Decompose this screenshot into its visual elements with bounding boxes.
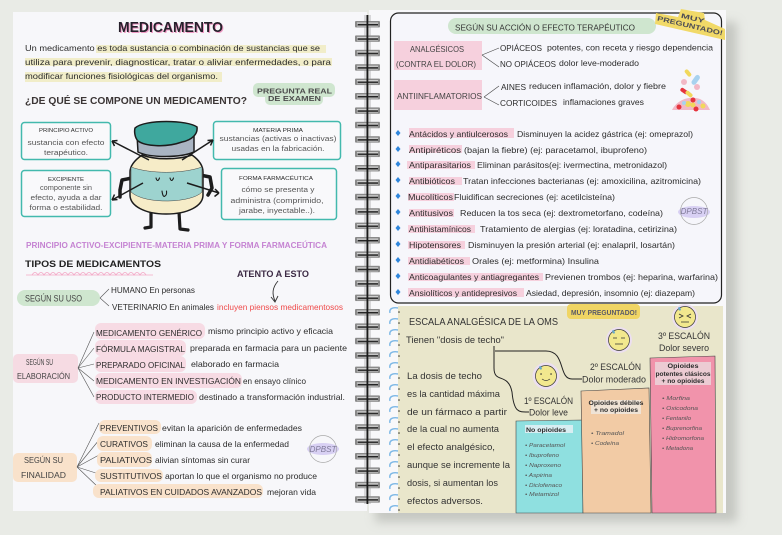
box: materia prima: sustancias (activas o inactivas) <box>220 136 336 143</box>
box: excipiente <box>22 170 110 216</box>
group: antiinflamatorios <box>394 80 666 110</box>
list: drug classes: Antácidos y antiulcerosos <box>409 129 508 139</box>
step: primer escalón <box>516 362 583 513</box>
group: antiinflamatorios: CORTICOIDES <box>500 98 557 108</box>
box: forma farmacéutica: jarabe, inyectable..). <box>238 208 315 215</box>
list: drug classes: Antihistamínicos <box>409 224 471 234</box>
badge: muy preguntado <box>567 304 640 319</box>
badge: muy preguntado <box>655 8 725 40</box>
step: segundo escalón: • Codeína <box>591 441 619 447</box>
badge: muy preguntado: MUY <box>680 13 706 25</box>
list: drug classes: Antiparasitarios <box>409 160 471 170</box>
group: analgésicos: dolor leve-moderado <box>559 58 639 68</box>
heading: escala: ESCALA ANALGÉSICA DE LA OMS <box>409 315 558 328</box>
step: tercer escalón <box>650 304 716 513</box>
step: tercer escalón: • Metadona <box>662 446 693 452</box>
group: según su elaboración: MEDICAMENTO GENÉRICO <box>96 328 202 338</box>
step: tercer escalón: • Morfina <box>662 396 690 402</box>
list: drug classes: Disminuyen la acidez gástrica (ej: omeprazol) <box>517 129 693 139</box>
step: primer escalón: • Diclofenaco <box>525 483 562 489</box>
box: excipiente: forma o estabilidad. <box>30 205 103 212</box>
group: según su uso: SEGÚN SU USO <box>25 294 82 304</box>
list: drug classes: Fluidifican secreciones (ej: acetilcisteína) <box>454 192 615 202</box>
text: dosis de techo: de un fármaco a partir <box>407 407 507 417</box>
text block: definition: utiliza para prevenir, diagnosticar, tratar o aliviar enfermedades, o para <box>25 57 331 67</box>
group: según su elaboración: PRODUCTO INTERMEDIO <box>96 392 194 402</box>
text: dosis de techo: Tienen "dosis de techo" <box>406 335 504 345</box>
box: materia prima: MATERIA PRIMA <box>253 128 303 134</box>
list: drug classes: Previenen trombos (ej: heparina, warfarina) <box>545 272 718 282</box>
step: segundo escalón: Opioides débiles <box>588 400 644 407</box>
group: según su elaboración: mismo principio activo y eficacia <box>208 326 333 336</box>
text block: definition: modificar funciones fisiológicas del organismo. <box>25 71 218 81</box>
text: dosis de techo: La dosis de techo <box>407 371 482 381</box>
icon: watermark stamp left: DPBST <box>310 445 337 454</box>
group: analgésicos: (CONTRA EL DOLOR) <box>396 59 476 69</box>
icon: watermark stamp right <box>678 198 710 224</box>
list: drug classes: Tratan infecciones bacterianas (ej: amoxicilina, azitromicina) <box>463 176 701 186</box>
group: antiinflamatorios: inflamaciones graves <box>563 97 644 107</box>
group: según su uso: incluyen piensos medicamentosos <box>217 302 343 312</box>
list: drug classes: Asiedad, depresión, insomnio (ej: diazepam) <box>526 288 695 298</box>
group: según su finalidad: FINALIDAD <box>21 471 66 480</box>
page shadow <box>375 22 737 522</box>
badge: pregunta real de examen: DE EXAMEN <box>268 94 321 103</box>
step: segundo escalón: 2º ESCALÓN <box>590 362 641 372</box>
group: analgésicos: potentes, con receta y riesgo dependencia <box>547 42 713 52</box>
text: dosis de techo: aunque se incremente la <box>407 460 510 470</box>
group: según su elaboración: destinado a transformación industrial. <box>199 392 345 402</box>
step: tercer escalón: • Oxicodona <box>662 406 698 412</box>
group: según su elaboración: elaborado en farmacia <box>191 359 279 369</box>
group: según su uso: HUMANO En personas <box>111 285 195 295</box>
step: primer escalón: • Metamizol <box>525 492 560 498</box>
group: según su finalidad: SUSTITUTIVOS <box>100 471 162 481</box>
step: tercer escalón: • Fentanilo <box>662 416 691 422</box>
list: drug classes <box>396 128 718 298</box>
box: principio activo: sustancia con efecto <box>28 140 105 147</box>
list: drug classes: Anticoagulantes y antiagregantes <box>409 272 539 282</box>
icon: jar mascot <box>120 122 212 230</box>
group: según su finalidad: SEGÚN SU <box>24 456 63 465</box>
step: primer escalón: • Naproxeno <box>525 463 561 469</box>
text: dosis de techo: es la cantidad máxima <box>407 389 500 399</box>
group: según su elaboración: FÓRMULA MAGISTRAL <box>96 344 185 354</box>
title: MEDICAMENTO <box>118 19 223 36</box>
step: tercer escalón: • Hidromorfona <box>662 436 704 442</box>
group: según su finalidad <box>13 420 317 498</box>
box: excipiente: EXCIPIENTE <box>48 177 84 183</box>
box: materia prima: usadas en la fabricación. <box>232 146 325 153</box>
step: segundo escalón: • Tramadol <box>591 431 625 437</box>
step: tercer escalón: • Buprenorfina <box>662 426 702 432</box>
list: drug classes: Tratamiento de alergias (ej: loratadina, cetirizina) <box>480 224 677 234</box>
step: primer escalón: • Aspirina <box>525 473 552 479</box>
icon: watermark stamp left <box>307 436 339 462</box>
step: tercer escalón: Opioides <box>668 363 699 370</box>
icon: watermark stamp right: DPBST <box>681 207 708 216</box>
box: forma farmacéutica: FORMA FARMACÉUTICA <box>239 175 313 182</box>
header pill: SEGÚN SU ACCIÓN O EFECTO TERAPÉUTICO <box>455 22 635 32</box>
badge: pregunta real de examen: PREGUNTA REAL <box>257 86 332 96</box>
text: dosis de techo: de la cual no aumenta <box>407 424 499 434</box>
group: según su finalidad: PREVENTIVOS <box>100 423 158 433</box>
panel: escala analgésica <box>389 304 723 513</box>
box: excipiente: efecto, ayuda a dar <box>30 195 102 202</box>
badge: pregunta real de examen <box>253 83 335 105</box>
group: según su finalidad: aportan lo que el organismo no produce <box>165 471 317 481</box>
box: principio activo <box>22 122 110 160</box>
group: analgésicos: OPIÁCEOS <box>500 43 542 53</box>
box: principio activo: terapéutico. <box>44 150 88 157</box>
group: según su uso: VETERINARIO En animales <box>112 302 214 312</box>
text block: definition <box>25 43 332 82</box>
step: primer escalón: • Paracetamol <box>525 443 566 449</box>
step: primer escalón: • Ibuprofeno <box>525 453 559 459</box>
arrows: jar to boxes <box>112 140 219 200</box>
group: según su finalidad: alivian síntomas sin curar <box>155 455 250 465</box>
group: según su elaboración: preparada en farmacia para un paciente <box>190 343 347 353</box>
step: tercer escalón: 3º ESCALÓN <box>658 331 710 341</box>
panel: left page <box>13 12 367 511</box>
title: MEDICAMENTO <box>119 20 224 37</box>
group: según su finalidad: eliminan la causa de la enfermedad <box>155 439 289 449</box>
box: principio activo: PRINCIPIO ACTIVO <box>39 128 93 134</box>
list: drug classes: Mucolíticos <box>408 192 453 202</box>
header pill <box>448 18 656 34</box>
group: según su finalidad: evitan la aparición de enfermedades <box>162 423 302 433</box>
list: drug classes: Antidiabéticos <box>409 256 464 266</box>
text: dosis de techo: dosis, si aumentan los <box>407 478 499 488</box>
list: drug classes: Ansiolíticos y antidepresivos <box>409 288 517 298</box>
list: drug classes: Eliminan parásitos(ej: ivermectina, metronidazol) <box>477 160 667 170</box>
step: segundo escalón: + no opioides <box>594 407 639 414</box>
callout: atento a esto <box>237 269 309 302</box>
group: antiinflamatorios: ANTIINFLAMATORIOS <box>397 91 482 101</box>
step: primer escalón: Dolor leve <box>529 408 568 418</box>
group: según su elaboración: ELABORACIÓN <box>17 372 70 381</box>
heading: tipos de medicamentos: TIPOS DE MEDICAMENTOS <box>25 259 161 270</box>
list: drug classes: Disminuyen la presión arterial (ej: enalapril, losartán) <box>468 240 675 250</box>
connector lines <box>494 346 582 412</box>
step: primer escalón: 1º ESCALÓN <box>524 396 573 406</box>
box: materia prima <box>214 122 340 160</box>
list: drug classes: Antitusivos <box>409 208 453 218</box>
heading: purple line: PRINCIPIO ACTIVO-EXCIPIENTE-MATERIA PRIMA Y FORMA FARMACEÚTICA <box>26 241 327 250</box>
text: dosis de techo <box>406 335 510 506</box>
callout: atento a esto: ATENTO A ESTO <box>237 269 309 280</box>
group: según su elaboración: MEDICAMENTO EN INVESTIGACIÓN <box>96 376 241 386</box>
list: drug classes: (bajan la fiebre) (ej: paracetamol, ibuprofeno) <box>464 145 647 155</box>
group: según su finalidad: mejoran vida <box>267 487 316 497</box>
list: drug classes: Antibióticos <box>409 176 455 186</box>
group: según su elaboración <box>13 323 347 404</box>
step: segundo escalón: Dolor moderado <box>582 374 646 384</box>
list: drug classes: Reducen la tos seca (ej: dextrometorfano, codeína) <box>460 208 663 218</box>
text: dosis de techo: el efecto analgésico, <box>407 442 495 452</box>
group: según su finalidad: CURATIVOS <box>100 439 148 449</box>
spiral binding <box>355 15 383 506</box>
icon: pills <box>672 69 710 112</box>
list: drug classes: Antipiréticos <box>409 145 461 155</box>
step: tercer escalón: Dolor severo <box>659 343 709 353</box>
box: forma farmacéutica: administra (comprimido, <box>230 198 324 205</box>
step: segundo escalón <box>581 327 651 513</box>
text: dosis de techo: efectos adversos. <box>407 496 483 506</box>
box: forma farmacéutica: cómo se presenta y <box>242 187 315 194</box>
group: según su elaboración: PREPARADO OFICINAL <box>96 360 185 370</box>
group: analgésicos: NO OPIÁCEOS <box>500 59 556 69</box>
box: forma farmacéutica <box>222 168 336 220</box>
heading: tipos de medicamentos <box>25 259 161 275</box>
step: primer escalón: No opioides <box>526 427 567 434</box>
group: según su elaboración: SEGÚN SU <box>26 358 53 367</box>
group: analgésicos <box>394 41 713 70</box>
box: excipiente: componente sin <box>40 185 92 192</box>
panel: right page <box>369 8 726 513</box>
text block: definition: Un medicamento es toda sustancia o combinación de sustancias que se <box>25 43 320 53</box>
panel: acción terapéutica <box>390 8 725 303</box>
group: según su uso <box>17 285 343 312</box>
list: drug classes: Hipotensores <box>409 240 461 250</box>
badge: muy preguntado: PREGUNTADO! <box>656 16 723 37</box>
list: drug classes: Orales (ej: metformina) Insulina <box>472 256 599 266</box>
heading: composition: ¿DE QUÉ SE COMPONE UN MEDICAMENTO? <box>25 94 247 107</box>
step: tercer escalón: + no opioides <box>662 378 705 385</box>
group: según su elaboración: en ensayo clínico <box>243 376 306 386</box>
group: según su finalidad: PALIATIVOS <box>100 455 152 465</box>
group: según su finalidad: PALIATIVOS EN CUIDADOS AVANZADOS <box>100 487 262 497</box>
group: antiinflamatorios: reducen inflamación, dolor y fiebre <box>529 81 666 91</box>
step: tercer escalón: potentes clásicos <box>656 371 711 378</box>
group: antiinflamatorios: AINES <box>501 82 526 92</box>
badge: muy preguntado: MUY PREGUNTADO! <box>571 308 637 317</box>
group: analgésicos: ANALGÉSICOS <box>410 44 464 54</box>
